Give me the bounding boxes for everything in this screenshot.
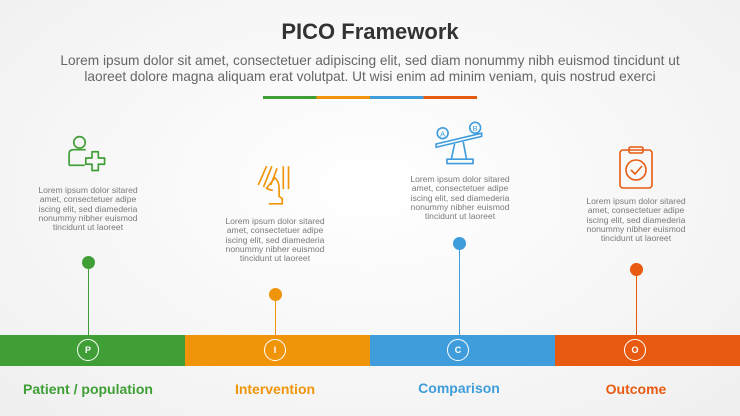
text: patient: nonummy nibher euismod (39, 213, 137, 223)
icon: hand domino (258, 166, 290, 205)
text: outcome: iscing elit, sed diamederia (587, 215, 685, 225)
text: intervention: iscing elit, sed diamederia (226, 235, 324, 245)
text: outcome: Lorem ipsum dolor sitared (586, 196, 686, 206)
color divider (263, 96, 477, 99)
icon: seesaw A B: B (473, 124, 478, 133)
text: comparison: Lorem ipsum dolor sitared (410, 174, 510, 184)
text: intervention: amet, consectetuer adipe (227, 225, 323, 235)
timeline bar (0, 335, 740, 366)
subtitle: laoreet dolore magna aliquam erat volutpat. Ut wisi enim ad minim veniam, quis nostrud exerci (84, 68, 656, 84)
text: intervention (225, 216, 325, 263)
text: Comparison (418, 380, 500, 396)
text: outcome: tincidunt ut laoreet (601, 233, 671, 243)
text: patient (38, 185, 138, 232)
icon: patient plus (68, 136, 106, 172)
letter circles: P (85, 345, 91, 355)
text: Intervention (235, 381, 315, 397)
text: comparison: tincidunt ut laoreet (425, 211, 495, 221)
title: PICO Framework (281, 19, 459, 44)
labels: Patient / population (23, 381, 153, 397)
letter circles (77, 339, 99, 361)
text: intervention: nonummy nibher euismod (226, 244, 324, 254)
text: outcome: amet, consectetuer adipe (588, 205, 684, 215)
text: patient: iscing elit, sed diamederia (39, 204, 137, 214)
text: comparison: iscing elit, sed diamederia (411, 193, 509, 203)
text: comparison: nonummy nibher euismod (411, 202, 509, 212)
icon: seesaw A B: A (440, 129, 446, 138)
pins (88, 262, 89, 336)
text: O (631, 345, 638, 355)
icon: clipboard check (619, 146, 653, 189)
text: patient: tincidunt ut laoreet (53, 222, 123, 232)
subtitle: Lorem ipsum dolor sit amet, consectetuer adipiscing elit, sed diam nonummy nibh euismod tincidunt ut (60, 53, 680, 68)
text: Outcome (606, 381, 666, 397)
text: comparison: amet, consectetuer adipe (412, 183, 508, 193)
text: patient: Lorem ipsum dolor sitared (38, 185, 138, 195)
text: intervention: Lorem ipsum dolor sitared (225, 216, 325, 226)
text: C (455, 345, 461, 355)
text: outcome (586, 196, 686, 243)
text: patient: amet, consectetuer adipe (40, 194, 136, 204)
text: I (274, 345, 276, 355)
icon: seesaw A B (435, 122, 482, 164)
text: outcome: nonummy nibher euismod (587, 224, 685, 234)
text: comparison (410, 174, 510, 221)
text: intervention: tincidunt ut laoreet (240, 253, 310, 263)
subtitle (60, 53, 680, 84)
